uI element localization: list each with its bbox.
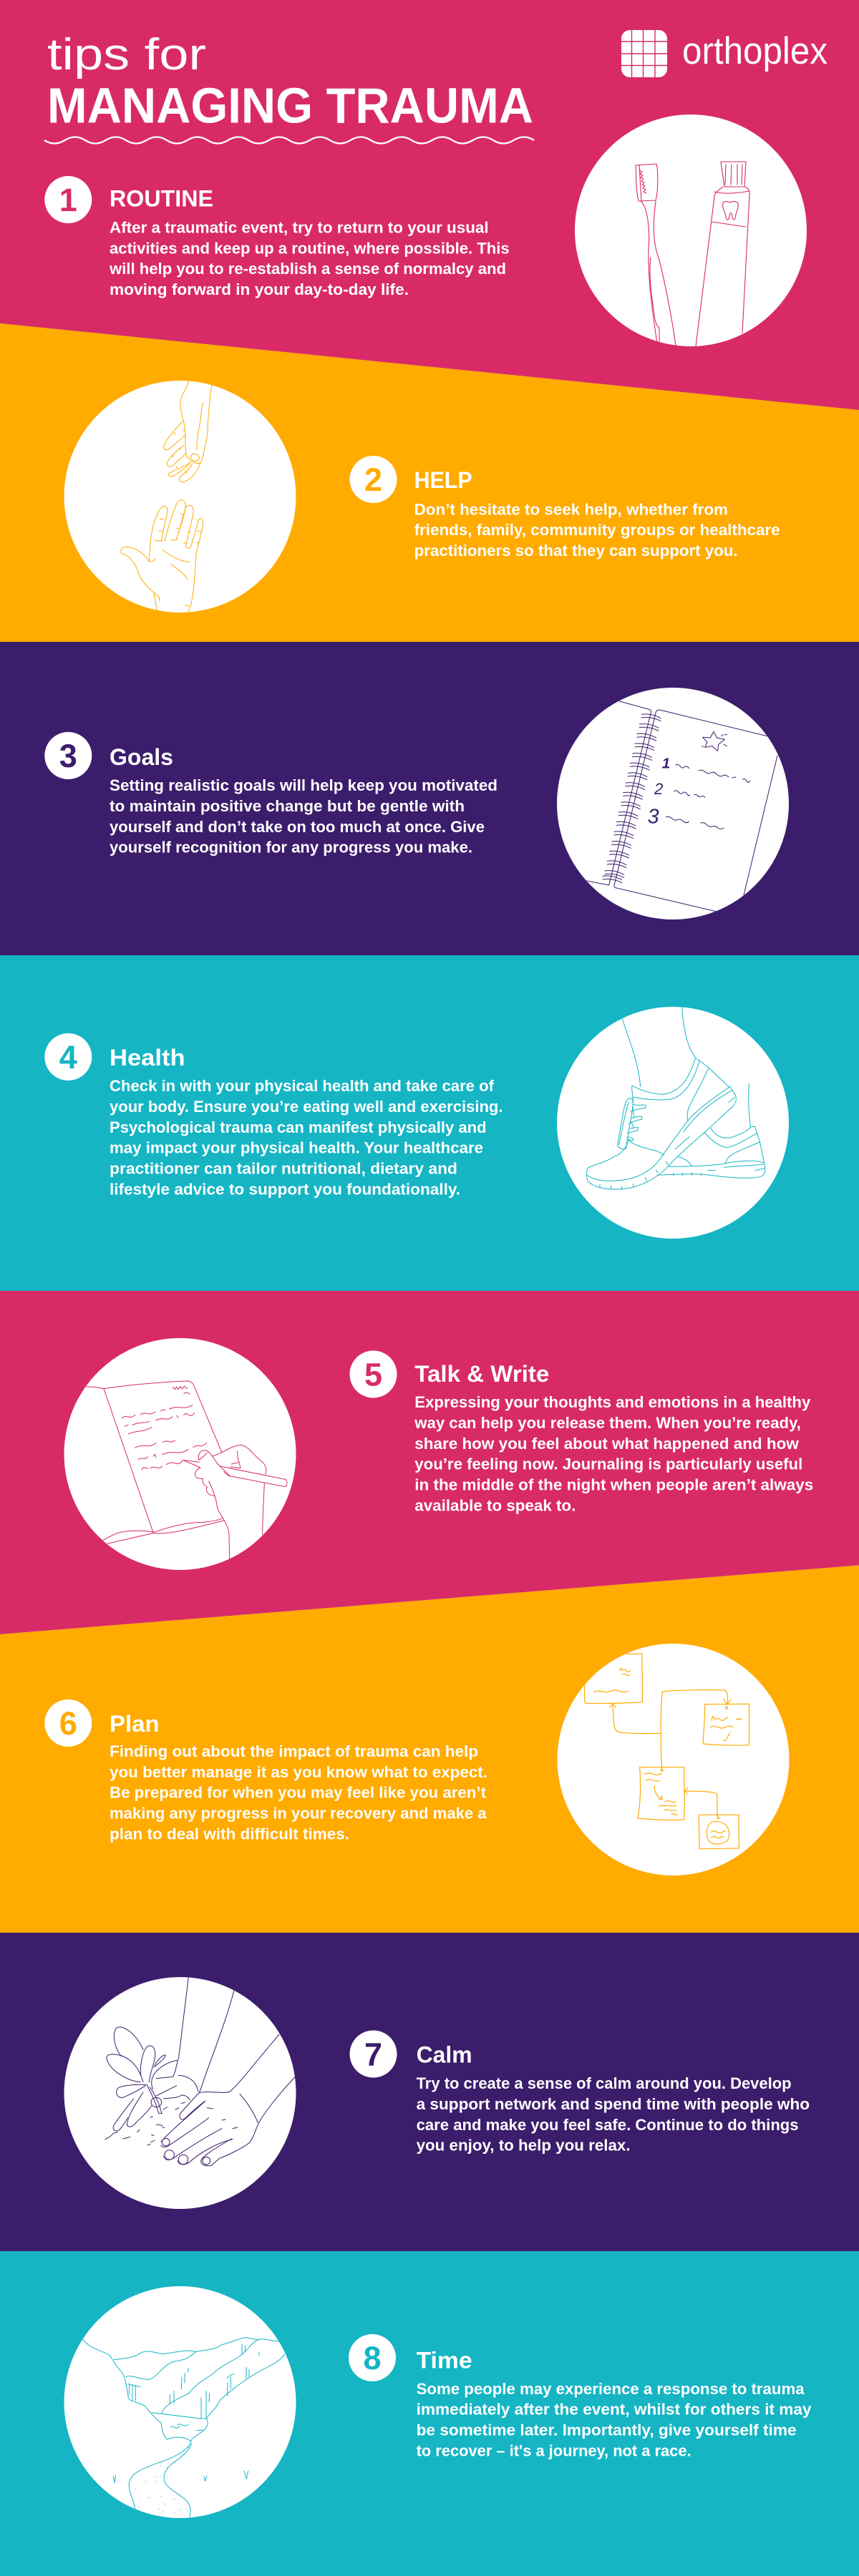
text block: plan: Be prepared for when you may feel like you aren’t xyxy=(110,1784,486,1802)
text block: plan: Finding out about the impact of trauma can help xyxy=(110,1742,478,1760)
text block: health xyxy=(110,1077,503,1198)
number badge 5: 5 xyxy=(364,1357,382,1392)
panel: health xyxy=(0,955,859,1291)
text block: routine xyxy=(109,219,510,298)
text block: help: practitioners so that they can support you. xyxy=(414,542,738,560)
heading: goals: Goals xyxy=(110,744,173,770)
text block: help: friends, family, community groups or healthcare xyxy=(414,521,780,539)
text block: health: lifestyle advice to support you foundationally. xyxy=(110,1180,460,1198)
panel: routine xyxy=(0,0,859,410)
text block: routine: After a traumatic event, try to return to your usual xyxy=(110,219,489,236)
text block: talk and write: available to speak to. xyxy=(414,1496,576,1514)
heading: plan: Plan xyxy=(110,1711,160,1737)
text block: routine: activities and keep up a routine, where possible. This xyxy=(110,239,510,257)
text block: health: Check in with your physical health and take care of xyxy=(110,1077,494,1095)
text block: plan: you better manage it as you know what to expect. xyxy=(110,1763,487,1781)
text block: calm: a support network and spend time with people who xyxy=(417,2095,810,2113)
text block: talk and write: you’re feeling now. Journaling is particularly useful xyxy=(414,1455,802,1473)
number badge 2 xyxy=(349,456,397,503)
illustration: writing in a journal xyxy=(64,1338,296,1570)
illustration: toothbrush and toothpaste xyxy=(575,114,807,346)
number badge 6: 6 xyxy=(59,1705,77,1742)
number badge 5 xyxy=(349,1351,397,1398)
text block: routine: moving forward in your day-to-day life. xyxy=(110,280,409,298)
heading: help: HELP xyxy=(414,467,472,493)
panel: calm xyxy=(0,1933,859,2251)
text block: health: Psychological trauma can manifest physically and xyxy=(110,1118,487,1136)
text block: health: practitioner can tailor nutritional, dietary and xyxy=(110,1159,457,1178)
number badge 1: 1 xyxy=(59,182,77,218)
panel: time xyxy=(0,2251,859,2576)
number badge 4 xyxy=(44,1033,92,1080)
heading: talk and write: Talk & Write xyxy=(414,1361,549,1387)
number badge 2: 2 xyxy=(364,462,382,498)
text block: health: may impact your physical health. Your healthcare xyxy=(110,1139,483,1157)
number badge 4: 4 xyxy=(59,1039,77,1075)
number badge 7 xyxy=(349,2031,397,2078)
illustration: reaching hands xyxy=(64,381,296,613)
text block: calm xyxy=(417,2074,810,2155)
text block: talk and write: way can help you release them. When you’re ready, xyxy=(414,1414,801,1432)
text block: plan: plan to deal with difficult times. xyxy=(110,1825,349,1843)
text block: goals: to maintain positive change but be gentle with xyxy=(110,797,465,815)
heading: time: Time xyxy=(417,2348,472,2373)
text block: goals xyxy=(110,776,498,857)
illustration: spiral notebook list xyxy=(557,688,789,919)
number badge 6 xyxy=(44,1699,92,1747)
text block: plan: making any progress in your recovery and make a xyxy=(110,1805,487,1823)
title: tips for: tips for xyxy=(47,30,206,79)
heading: calm: Calm xyxy=(417,2042,472,2068)
heading: health: Health xyxy=(110,1045,185,1070)
text block: time: Some people may experience a response to trauma xyxy=(417,2380,805,2398)
illustration: spiral notebook list: 3 xyxy=(648,805,659,828)
panel: plan xyxy=(0,1566,859,1933)
text block: time xyxy=(417,2380,812,2459)
illustration: river through a valley xyxy=(64,2286,296,2518)
illustration: flow chart of notes xyxy=(557,1644,789,1875)
panel: help xyxy=(0,323,859,642)
text block: time: to recover – it's a journey, not a race. xyxy=(417,2441,691,2459)
panel: goals xyxy=(0,642,859,955)
text block: routine: will help you to re-establish a sense of normalcy and xyxy=(109,260,506,278)
text block: time: be sometime later. Importantly, give yourself time xyxy=(417,2421,797,2439)
text block: talk and write: share how you feel about what happened and how xyxy=(414,1435,799,1453)
number badge 7: 7 xyxy=(364,2036,382,2072)
text block: talk and write xyxy=(414,1393,813,1514)
illustration: spiral notebook list: 2 xyxy=(654,780,663,798)
text block: plan xyxy=(110,1742,487,1843)
number badge 8 xyxy=(349,2334,396,2381)
number badge 3 xyxy=(44,732,92,779)
number badge 8: 8 xyxy=(363,2340,382,2376)
number badge 3: 3 xyxy=(59,738,77,774)
logo: orthoplex xyxy=(621,30,828,77)
number badge 1 xyxy=(44,176,92,223)
text block: help xyxy=(414,500,780,560)
panel: talk and write xyxy=(0,1291,859,1634)
text block: calm: Try to create a sense of calm around you. Develop xyxy=(417,2074,792,2092)
text block: health: your body. Ensure you’re eating well and exercising. xyxy=(110,1098,503,1116)
illustration: spiral notebook list: 1 xyxy=(662,756,670,772)
text block: help: Don’t hesitate to seek help, whether from xyxy=(414,500,728,518)
text block: time: immediately after the event, whilst for others it may xyxy=(417,2401,812,2419)
illustration: walking shoes xyxy=(557,1007,789,1239)
text block: talk and write: Expressing your thoughts and emotions in a healthy xyxy=(414,1393,811,1411)
illustration: hands planting a seedling xyxy=(64,1977,296,2209)
text block: talk and write: in the middle of the night when people aren’t always xyxy=(414,1475,813,1494)
text block: calm: care and make you feel safe. Continue to do things xyxy=(417,2116,799,2134)
text block: goals: yourself and don’t take on too much at once. Give xyxy=(110,818,485,836)
title: managing trauma: MANAGING TRAUMA xyxy=(47,77,533,133)
text block: goals: Setting realistic goals will help keep you motivated xyxy=(110,776,498,794)
text block: goals: yourself recognition for any progress you make. xyxy=(110,839,472,857)
heading: routine: ROUTINE xyxy=(110,186,213,212)
text block: calm: you enjoy, to help you relax. xyxy=(417,2137,631,2155)
logo: orthoplex: orthoplex xyxy=(682,30,828,72)
wavy underline xyxy=(44,137,534,143)
